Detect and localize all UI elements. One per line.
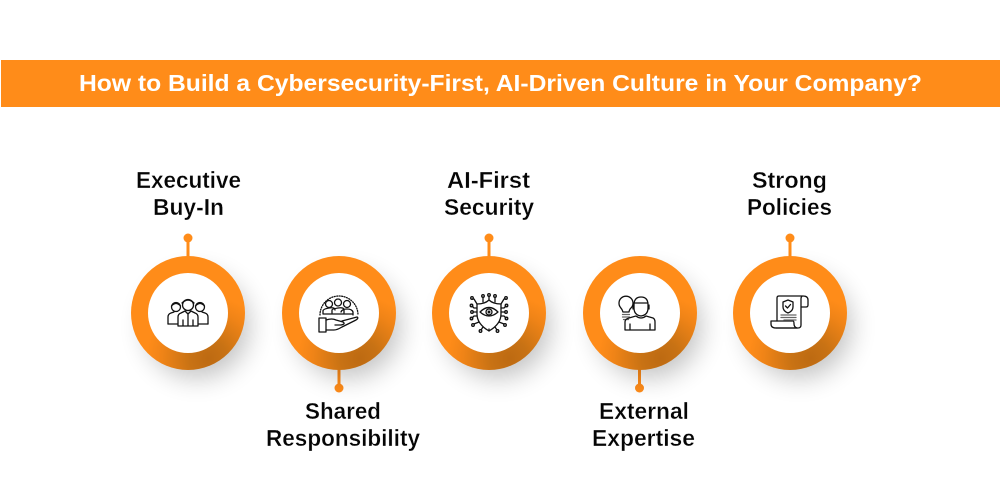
connector — [484, 234, 494, 260]
label: Shared Responsibility: Responsibility — [266, 425, 420, 451]
label: External Expertise: Expertise — [592, 425, 695, 451]
step 4: External Expertise — [583, 256, 701, 451]
label: Executive Buy-In: Executive — [136, 167, 241, 193]
connector — [184, 234, 192, 260]
ring — [432, 256, 550, 378]
icon: expert with light bulb — [619, 296, 655, 330]
ring — [131, 256, 249, 378]
label: Strong Policies: Policies — [747, 194, 832, 220]
label: AI-First Security: AI-First — [447, 167, 530, 193]
label: AI-First Security: Security — [444, 194, 534, 220]
step 5: Strong Policies — [733, 167, 851, 378]
icon: policy scroll with shield — [771, 296, 808, 328]
connector — [635, 366, 644, 392]
label: Shared Responsibility: Shared — [305, 398, 381, 424]
connector — [786, 234, 794, 260]
icon: team — [168, 300, 208, 326]
label: Strong Policies: Strong — [752, 167, 827, 193]
step 1: Executive Buy-In — [131, 167, 249, 378]
title: How to Build a Cybersecurity-First, AI-Driven Culture in Your Company? — [79, 70, 922, 96]
label: External Expertise: External — [599, 398, 689, 424]
label: Executive Buy-In: Buy-In — [153, 194, 224, 220]
step 3: AI-First Security — [432, 167, 550, 378]
ring — [583, 256, 701, 378]
ring — [282, 256, 400, 378]
icon: shield with eye and circuits — [470, 294, 508, 332]
connector — [334, 366, 344, 392]
ring — [733, 256, 851, 378]
title banner — [1, 60, 1000, 107]
icon: hand holding people — [319, 296, 358, 332]
step 2: Shared Responsibility — [266, 256, 420, 451]
